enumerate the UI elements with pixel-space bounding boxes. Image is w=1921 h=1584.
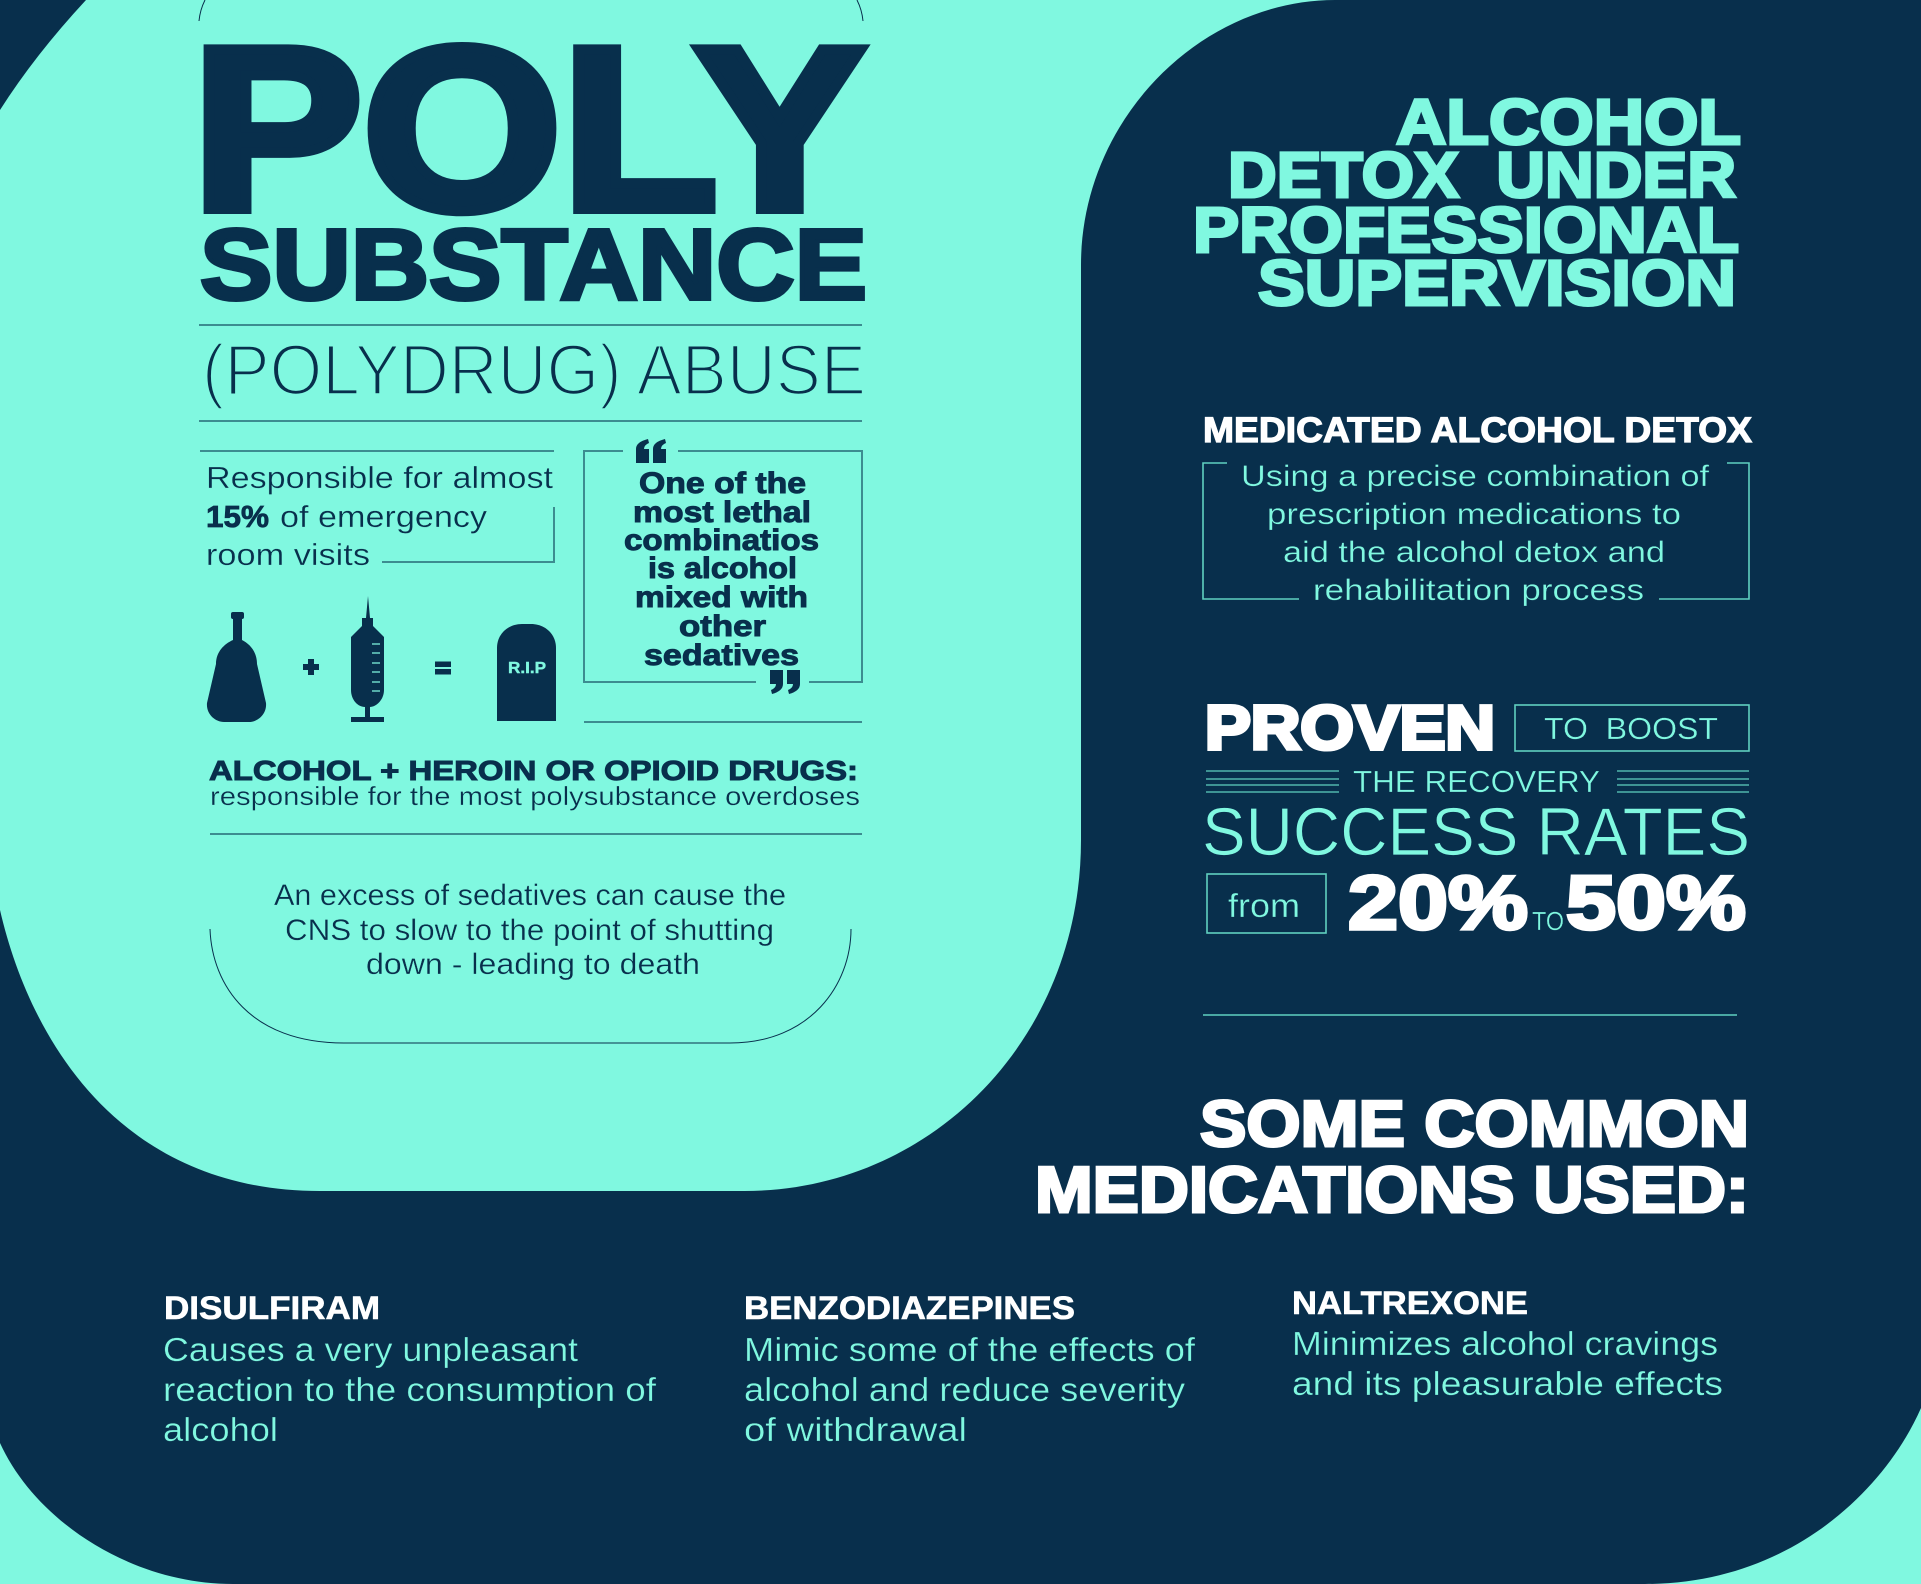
panel: medicated alcohol detox: MEDICATED ALCOHOL DETOX (1203, 411, 1753, 450)
heading: some common medications used (1035, 1087, 1749, 1226)
medication: benzodiazepines: of withdrawal (744, 1411, 967, 1448)
heading: some common medications used: SOME COMMON (1200, 1087, 1749, 1160)
icon: opening quote (636, 439, 666, 463)
title: POLY: POLY (192, 0, 865, 259)
callout: 15 percent of ER visits: of emergency (280, 499, 488, 534)
icon: closing quote (770, 670, 800, 694)
panel: medicated alcohol detox (1203, 411, 1753, 607)
medication: disulfiram: alcohol (163, 1411, 278, 1448)
title block (192, 0, 867, 421)
panel: polysubstance mint background (0, 0, 1335, 1191)
panel: medicated alcohol detox: prescription medications to (1267, 498, 1681, 531)
quote box (584, 439, 862, 722)
panel: proven success rates: TO BOOST (1544, 711, 1718, 746)
icon: equals (435, 662, 451, 674)
quote text: most lethal (633, 496, 811, 529)
medication: benzodiazepines (744, 1290, 1196, 1448)
icon: plus (303, 659, 319, 675)
callout: 15 percent of ER visits: Responsible for almost (206, 460, 553, 495)
icon: bottle (207, 612, 266, 722)
text block: sedatives excess: An excess of sedatives can cause the (274, 879, 786, 912)
panel: proven success rates: SUCCESS RATES (1202, 794, 1750, 870)
bottom right corner (1645, 1408, 1921, 1584)
icon: syringe (351, 596, 384, 722)
heading: alcohol plus heroin: ALCOHOL + HEROIN OR OPIOID DRUGS: (209, 755, 858, 786)
quote text: other (679, 610, 766, 643)
medication: benzodiazepines: alcohol and reduce severity (744, 1371, 1186, 1408)
medication: naltrexone (1292, 1285, 1723, 1402)
bottom left corner (0, 1443, 233, 1584)
text block: sedatives excess: down - leading to death (366, 948, 700, 981)
heading: alcohol detox under professional supervision (1193, 86, 1741, 319)
medication: naltrexone: NALTREXONE (1292, 1285, 1528, 1321)
callout: 15 percent of ER visits: 15% (206, 499, 269, 534)
text block: sedatives excess: CNS to slow to the point of shutting (285, 914, 774, 947)
panel: medicated alcohol detox: aid the alcohol detox and (1283, 536, 1665, 569)
panel: proven success rates: TO (1532, 906, 1564, 936)
heading: alcohol detox under professional supervision: SUPERVISION (1258, 247, 1736, 319)
medication: disulfiram: Causes a very unpleasant (163, 1331, 578, 1368)
panel: proven success rates: THE RECOVERY (1353, 764, 1600, 799)
panel: proven success rates: PROVEN (1205, 694, 1495, 763)
callout: 15 percent of ER visits: room visits (206, 537, 370, 572)
heading: alcohol detox under professional supervision: PROFESSIONAL (1193, 194, 1739, 266)
text block: sedatives excess (210, 879, 851, 1043)
heading: some common medications used: MEDICATIONS USED: (1035, 1153, 1749, 1226)
quote text: One of the (639, 467, 806, 500)
heading: alcohol detox under professional supervision: ALCOHOL (1396, 86, 1741, 158)
heading: alcohol plus heroin: responsible for the most polysubstance overdoses (210, 781, 860, 811)
quote text: is alcohol (648, 552, 797, 585)
heading: alcohol plus heroin (209, 755, 862, 834)
medication: benzodiazepines: Mimic some of the effects of (744, 1331, 1196, 1368)
subtitle: (POLYDRUG) ABUSE (202, 331, 866, 410)
panel: proven success rates: from (1228, 887, 1300, 924)
panel: proven success rates: 20% (1348, 861, 1528, 946)
callout: 15 percent of ER visits (200, 451, 554, 572)
medication: disulfiram (163, 1290, 657, 1448)
medication: naltrexone: Minimizes alcohol cravings (1292, 1325, 1718, 1362)
heading: alcohol detox under professional supervision: DETOX UNDER (1228, 139, 1736, 211)
panel: proven success rates: 50% (1566, 861, 1746, 946)
medication: naltrexone: and its pleasurable effects (1292, 1365, 1723, 1402)
quote text: combinatios (624, 524, 819, 557)
panel: medicated alcohol detox: rehabilitation process (1313, 574, 1644, 607)
medication: disulfiram: DISULFIRAM (164, 1290, 380, 1326)
panel: medicated alcohol detox: Using a precise combination of (1241, 460, 1710, 493)
title: SUBSTANCE: SUBSTANCE (200, 209, 867, 321)
medication: benzodiazepines: BENZODIAZEPINES (744, 1290, 1075, 1326)
quote text: mixed with (635, 581, 808, 614)
quote text: sedatives (644, 639, 799, 672)
icon: gravestone: R.I.P (508, 660, 546, 677)
icon: gravestone (497, 624, 556, 721)
medication: disulfiram: reaction to the consumption of (163, 1371, 657, 1408)
panel: proven success rates (1202, 694, 1750, 946)
quote text (624, 467, 819, 672)
